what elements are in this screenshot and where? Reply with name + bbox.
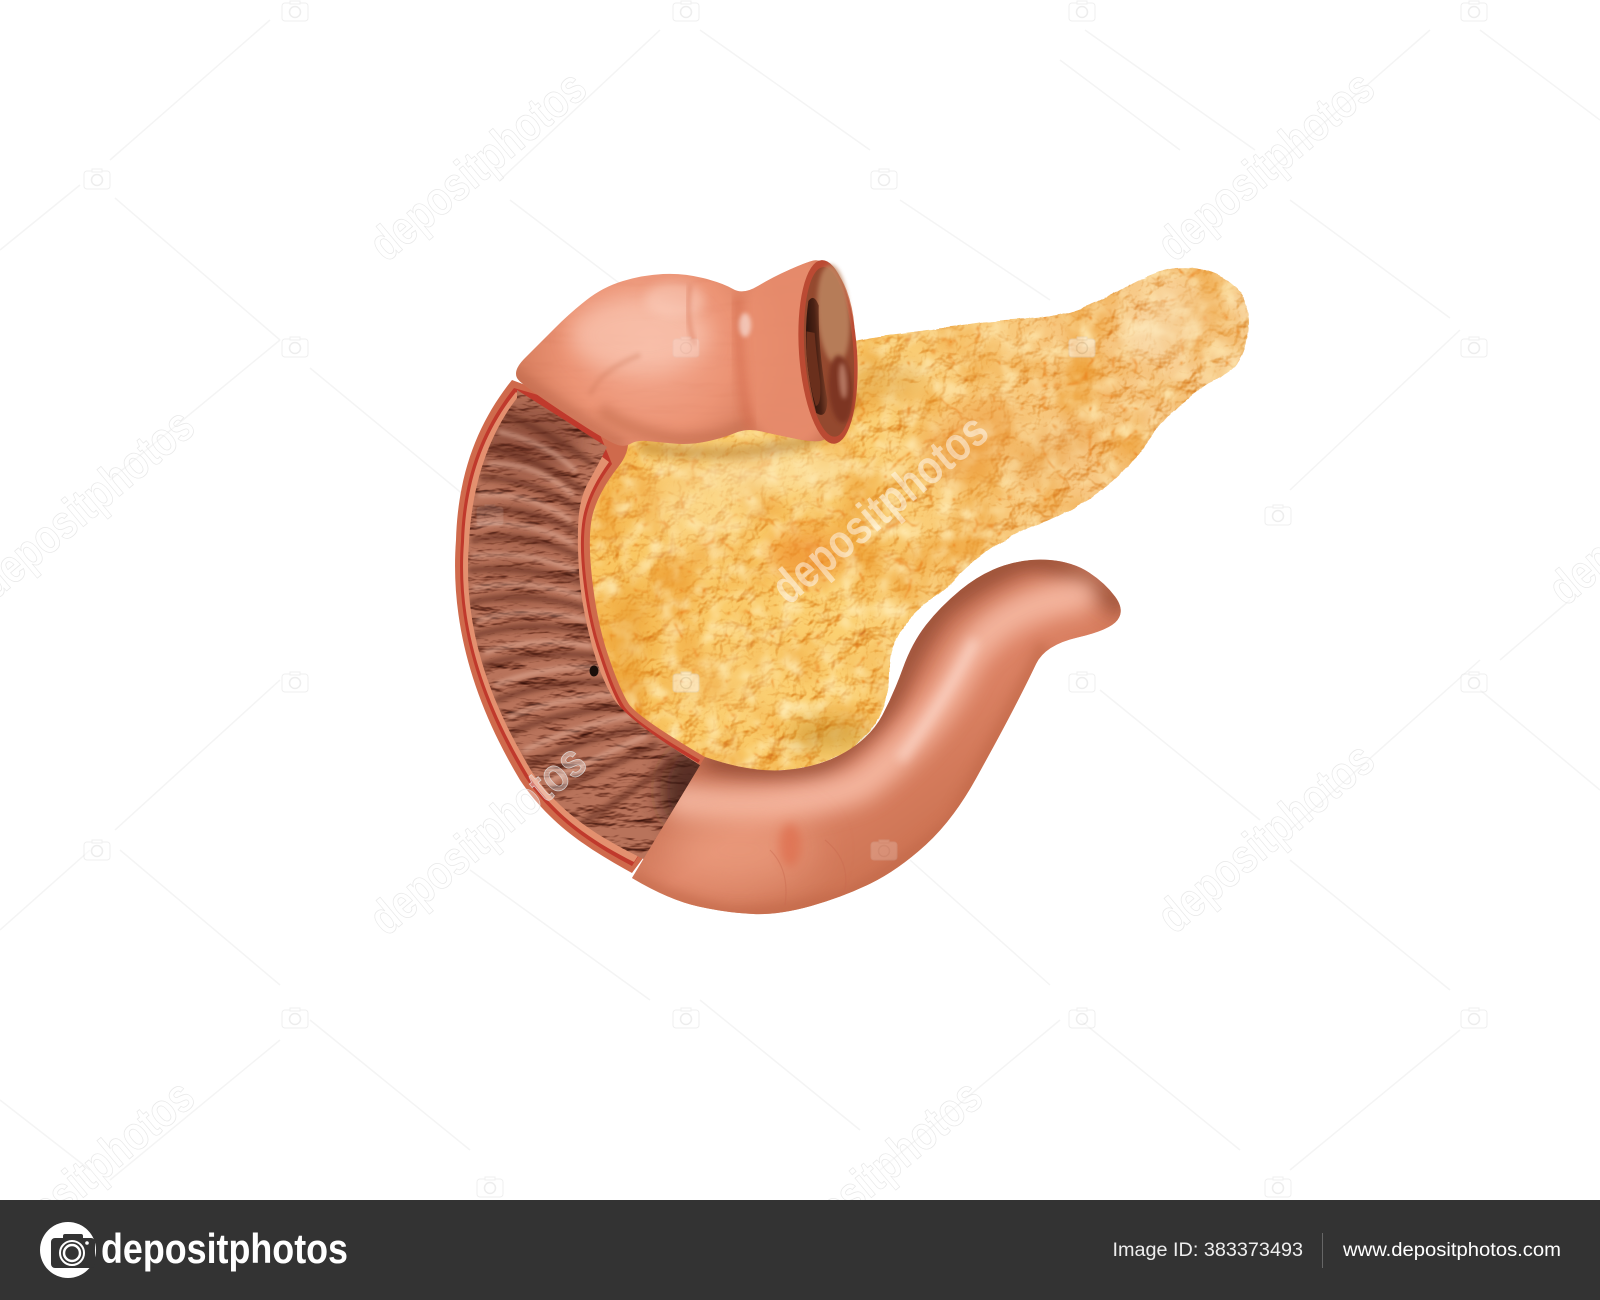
pancreas shading and veins bbox=[614, 274, 1228, 751]
illustration: pancreas with cut-open duodenum bbox=[360, 250, 1249, 946]
watermark: depositphotos text and camera marks behind the organ: depositphotos bbox=[756, 1070, 993, 1281]
watermark text across pancreas and duodenum: depositphotos bbox=[360, 735, 597, 946]
image id: Image ID: 383373493 bbox=[1112, 1240, 1303, 1261]
watermark text across pancreas and duodenum bbox=[360, 337, 1095, 946]
icon: small duct opening bbox=[590, 666, 598, 676]
duodenum: cut opening with lumen bbox=[793, 258, 863, 446]
watermark: depositphotos text and camera marks behind the organ: depositphotos bbox=[360, 61, 597, 272]
watermark: depositphotos text and camera marks behind the organ: depositphotos bbox=[1148, 61, 1385, 272]
duodenum: distal tube bbox=[620, 550, 1140, 920]
duodenum wall: cut-open crescent bbox=[455, 380, 712, 873]
duodenum: upper bulb bbox=[516, 260, 855, 446]
duodenum mucosa: inner folds bbox=[468, 390, 700, 859]
logo: depositphotos camera badge bbox=[40, 1222, 96, 1278]
watermark: depositphotos text and camera marks behind the organ: depositphotos bbox=[1148, 733, 1385, 944]
logo wordmark: depositphotos bbox=[101, 1225, 348, 1272]
watermark text across pancreas and duodenum: depositphotos bbox=[762, 404, 999, 615]
website url: www.depositphotos.com bbox=[1342, 1240, 1561, 1261]
pancreas body bbox=[582, 268, 1249, 772]
footer bar bbox=[0, 1200, 1600, 1300]
